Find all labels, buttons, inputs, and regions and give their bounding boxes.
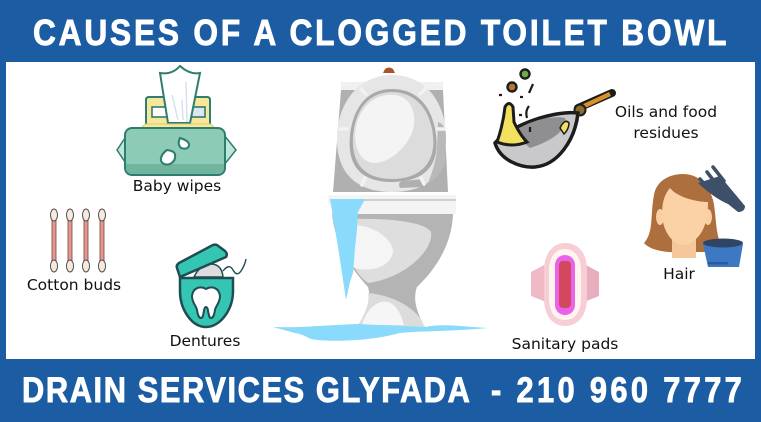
panel: white content area xyxy=(6,62,755,359)
icon: sanitary pad xyxy=(531,243,599,326)
icon: hair with comb and dye bowl xyxy=(644,167,745,267)
icon: cotton buds xyxy=(50,209,106,272)
label: baby wipes: Baby wipes xyxy=(133,177,221,195)
icon: clogged toilet with overflowing water xyxy=(273,68,488,341)
label: oils and food residues: residues xyxy=(633,124,699,142)
label: hair: Hair xyxy=(663,265,696,283)
label: dentures: Dentures xyxy=(170,332,240,350)
footer: contact banner: - 210 960 7777 xyxy=(491,370,742,409)
footer: contact banner: DRAIN SERVICES GLYFADA xyxy=(22,370,470,409)
icon: baby wipes pack xyxy=(117,66,236,175)
label: oils and food residues: Oils and food xyxy=(615,103,717,121)
icon: dental floss with tooth xyxy=(177,245,246,327)
footer: contact banner xyxy=(22,370,742,409)
label: cotton buds: Cotton buds xyxy=(27,276,121,294)
icon: wok with food xyxy=(495,70,612,167)
label: sanitary pads: Sanitary pads xyxy=(512,335,618,353)
title: CAUSES OF A CLOGGED TOILET BOWL xyxy=(33,13,726,53)
